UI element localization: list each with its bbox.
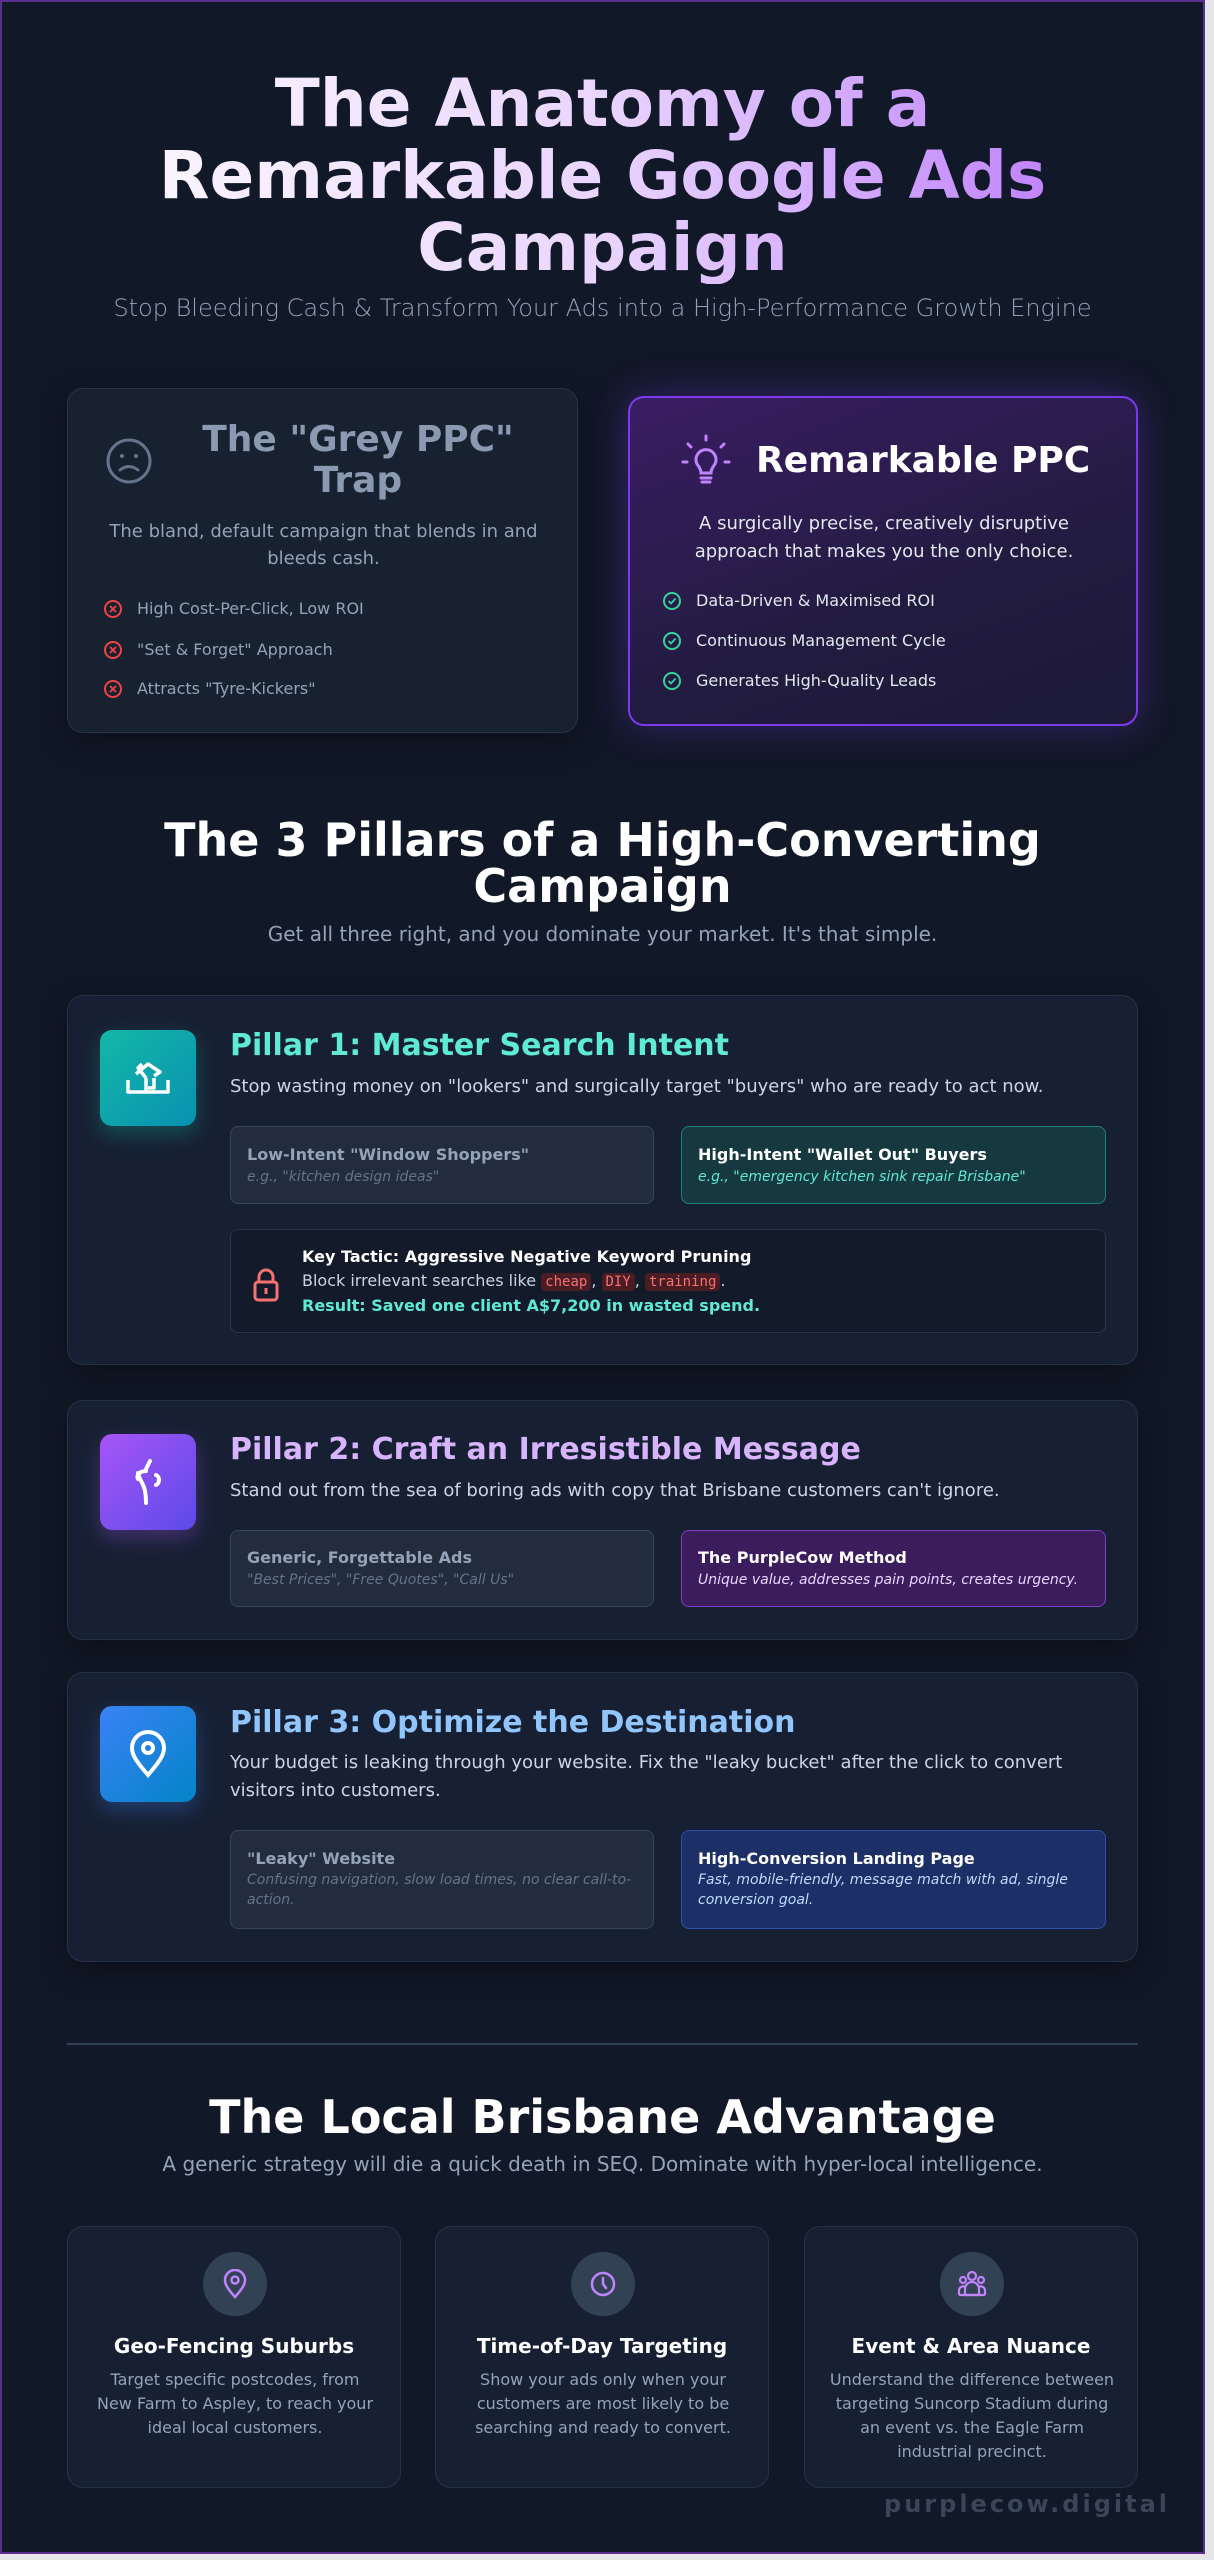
panel: pillar 3 xyxy=(67,1672,1138,1962)
box: purplecow method xyxy=(681,1530,1106,1607)
list: grey negatives: Attracts "Tyre-Kickers" xyxy=(137,679,316,698)
panel: event nuance: Understand the difference between targeting Suncorp Stadium during an event vs. the Eagle Farm industrial precinct. xyxy=(830,2370,1114,2461)
heading: 3 pillars xyxy=(164,813,1041,913)
icon: clock xyxy=(571,2252,635,2316)
watermark: purplecow.digital xyxy=(884,2490,1170,2518)
icon: pillar 2 xyxy=(100,1434,196,1530)
text: remarkable description: A surgically precise, creatively disruptive approach that makes you the only choice. xyxy=(695,513,1073,562)
icon: lock xyxy=(254,1268,278,1302)
subtitle: local: A generic strategy will die a quick death in SEQ. Dominate with hyper-local intelligence. xyxy=(162,2152,1043,2176)
icon: pillar 1 xyxy=(100,1030,196,1126)
panel: event nuance: Event & Area Nuance xyxy=(852,2334,1090,2358)
list: remarkable positives: Data-Driven & Maximised ROI xyxy=(696,591,935,610)
list: grey negatives xyxy=(104,599,364,698)
heading: pillar 1: Pillar 1: Master Search Intent xyxy=(230,1028,729,1063)
list: remarkable positives: Generates High-Quality Leads xyxy=(696,671,936,690)
heading: pillar 3: Pillar 3: Optimize the Destination xyxy=(230,1705,795,1740)
box: low intent: e.g., "kitchen design ideas" xyxy=(247,1169,439,1185)
icon: lightbulb xyxy=(682,434,730,484)
icon: sad face xyxy=(106,438,152,484)
box: generic ads: Generic, Forgettable Ads xyxy=(247,1548,472,1567)
panel: pillar 2 xyxy=(67,1400,1138,1640)
box: landing page xyxy=(681,1830,1106,1929)
box: landing page: High-Conversion Landing Page xyxy=(698,1849,975,1868)
box: landing page: Fast, mobile-friendly, message match with ad, single conversion goal. xyxy=(698,1872,1068,1908)
heading: remarkable ppc: Remarkable PPC xyxy=(756,440,1090,481)
list: remarkable positives xyxy=(663,591,946,690)
heading: pillar 2: Pillar 2: Craft an Irresistible Message xyxy=(230,1432,861,1467)
list: remarkable positives: Continuous Management Cycle xyxy=(696,631,946,650)
text: pillar 3 description: Your budget is leaking through your website. Fix the "leaky bucket" after the click to convert visitors into customers. xyxy=(230,1752,1062,1801)
panel: geo-fencing: Target specific postcodes, from New Farm to Aspley, to reach your ideal local customers. xyxy=(97,2370,373,2437)
box: generic ads: "Best Prices", "Free Quotes", "Call Us" xyxy=(247,1572,514,1588)
panel: geo-fencing xyxy=(67,2226,401,2488)
box: leaky website: Confusing navigation, slow load times, no clear call-to-action. xyxy=(247,1872,631,1908)
list: grey negatives: "Set & Forget" Approach xyxy=(137,640,333,659)
panel: geo-fencing: Geo-Fencing Suburbs xyxy=(114,2334,354,2358)
panel: time-of-day: Show your ads only when your customers are most likely to be searching and ready to convert. xyxy=(475,2370,731,2437)
box: leaky website: "Leaky" Website xyxy=(247,1849,395,1868)
text: grey description: The bland, default campaign that blends in and bleeds cash. xyxy=(109,521,538,569)
box: high intent: e.g., "emergency kitchen sink repair Brisbane" xyxy=(698,1169,1026,1185)
panel: grey ppc trap xyxy=(67,388,578,733)
panel: time-of-day xyxy=(435,2226,769,2488)
heading: grey ppc: The "Grey PPC" Trap xyxy=(202,419,514,501)
callout: key tactic: Key Tactic: Aggressive Negative Keyword Pruning xyxy=(302,1247,751,1266)
icon: pillar 3 xyxy=(100,1706,196,1802)
heading: local brisbane: The Local Brisbane Advantage xyxy=(209,2090,996,2144)
text: pillar 2 description: Stand out from the sea of boring ads with copy that Brisbane customers can't ignore. xyxy=(230,1480,1000,1501)
callout: key tactic: Result: Saved one client A$7,200 in wasted spend. xyxy=(302,1296,760,1315)
panel: event nuance xyxy=(804,2226,1138,2488)
box: high intent: High-Intent "Wallet Out" Buyers xyxy=(698,1145,987,1164)
box: purplecow method: Unique value, addresses pain points, creates urgency. xyxy=(698,1572,1078,1588)
box: low intent: Low-Intent "Window Shoppers" xyxy=(247,1145,529,1164)
icon: people xyxy=(940,2252,1004,2316)
panel: time-of-day: Time-of-Day Targeting xyxy=(477,2334,727,2358)
icon: location xyxy=(203,2252,267,2316)
box: high intent xyxy=(681,1126,1106,1204)
subtitle: Stop Bleeding Cash & Transform Your Ads into a High-Performance Growth Engine xyxy=(113,294,1092,322)
box: low intent xyxy=(230,1126,654,1204)
panel: pillar 1 xyxy=(67,995,1138,1365)
text: pillar 1 description: Stop wasting money on "lookers" and surgically target "buyers" who are ready to act now. xyxy=(230,1076,1043,1097)
callout: key tactic xyxy=(230,1229,1106,1333)
list: grey negatives: High Cost-Per-Click, Low ROI xyxy=(137,599,364,618)
subtitle: pillars: Get all three right, and you dominate your market. It's that simple. xyxy=(268,922,937,946)
box: leaky website xyxy=(230,1830,654,1929)
callout: key tactic: Block irrelevant searches like cheap, DIY, training. xyxy=(302,1271,726,1290)
panel: remarkable ppc xyxy=(628,396,1138,726)
heading: 3 pillars: The 3 Pillars of a High-Converting xyxy=(164,813,1041,867)
box: purplecow method: The PurpleCow Method xyxy=(698,1548,907,1567)
heading: 3 pillars: Campaign xyxy=(473,859,732,913)
title: The Anatomy of a Remarkable Google Ads Campaign xyxy=(159,65,1046,286)
box: generic ads xyxy=(230,1530,654,1607)
